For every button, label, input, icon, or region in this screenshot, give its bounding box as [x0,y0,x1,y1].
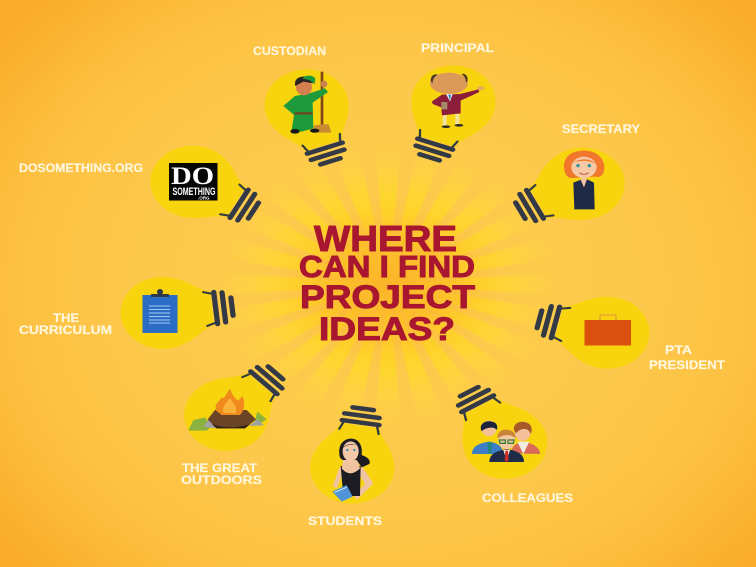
panel: the curriculum [19,271,236,352]
icon: principal [430,73,484,128]
label: principal: PRINCIPAL [421,41,494,55]
label: the great outdoors: THE GREAT [182,461,258,475]
label: the great outdoors: OUTDOORS [181,473,262,487]
dosomething bulb [135,133,274,242]
colleagues bulb [433,373,563,492]
icon: briefcase [584,315,631,346]
icon: do something logo: DO [171,163,214,190]
title: WHERE [314,218,457,259]
icon: do something logo: .ORG [198,196,210,200]
title [299,218,476,347]
label: the great outdoors [181,461,262,487]
panel: principal [390,41,507,170]
panel: pta president [530,284,726,376]
panel: dosomething.org [19,133,274,242]
label: the curriculum [19,311,112,337]
title: CAN I FIND [299,249,475,284]
panel: secretary [501,122,640,243]
students bulb [304,403,405,509]
label: the curriculum: THE [53,311,79,325]
label: colleagues: COLLEAGUES [482,491,573,505]
label: pta president: PRESIDENT [649,358,726,372]
panel: colleagues [433,373,573,505]
custodian bulb [253,59,370,174]
pta bulb [530,284,658,376]
icon: student [332,439,373,502]
label: pta president: PTA [665,343,692,357]
panel: custodian [253,44,370,174]
outdoors bulb [167,347,305,466]
label: secretary: SECRETARY [562,122,640,136]
title: PROJECT [300,279,476,315]
label: dosomething.org: DOSOMETHING.ORG [19,161,143,175]
panel: students [304,403,405,528]
secretary bulb [501,135,639,243]
label: the curriculum: CURRICULUM [19,323,112,337]
icon: campfire [188,389,267,431]
curriculum bulb [116,271,236,352]
icon: custodian [283,72,332,134]
icon: colleagues [472,420,540,462]
label: custodian: CUSTODIAN [253,44,326,58]
icon: secretary [564,151,604,209]
icon: do something logo: SOMETHING [172,186,216,198]
icon: clipboard [142,289,178,333]
panel: the great outdoors [167,347,305,487]
label: students: STUDENTS [308,514,382,528]
title: IDEAS? [319,311,455,347]
icon: do something logo [169,163,218,200]
label: pta president [649,343,726,372]
principal bulb [390,55,507,170]
sunburst rays [208,134,568,434]
